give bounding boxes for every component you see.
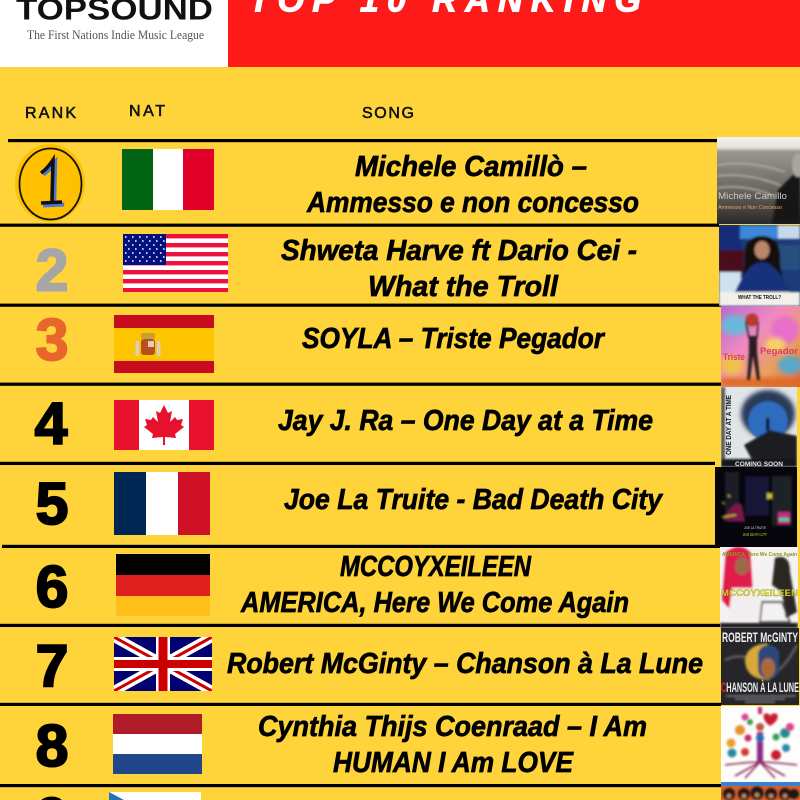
album cover 3: Pegador bbox=[760, 346, 798, 357]
logo tagline: The First Nations Indie Music League bbox=[27, 28, 204, 42]
flag: Czech Republic bbox=[109, 792, 201, 800]
song: Shweta Harve: Shweta Harve ft Dario Cei - bbox=[281, 235, 637, 267]
song: Robert McGinty: Robert McGinty – Chanson à La Lune bbox=[227, 648, 703, 680]
flag: Netherlands bbox=[113, 714, 202, 774]
song: SOYLA: SOYLA – Triste Pegador bbox=[302, 323, 606, 355]
song: McCoy x Eileen: AMERICA, Here We Come Again bbox=[240, 587, 629, 619]
song: Michele Camillò: Michele Camillò – bbox=[355, 151, 587, 183]
rank 6: 6 bbox=[36, 554, 68, 620]
song: Michele Camillò: Ammesso e non concesso bbox=[306, 187, 639, 219]
flag: Canada bbox=[114, 400, 214, 450]
row 4 bbox=[35, 387, 797, 468]
song: Shweta Harve: What the Troll bbox=[368, 271, 559, 303]
song: McCoy x Eileen bbox=[240, 551, 629, 619]
column headings bbox=[25, 103, 414, 122]
album cover 2 bbox=[719, 225, 800, 306]
row 7 bbox=[36, 628, 799, 705]
album cover 1: Michele Camillo bbox=[718, 191, 787, 202]
flag: USA bbox=[123, 234, 228, 292]
album cover 4 bbox=[721, 387, 797, 468]
rank 2: 2 bbox=[36, 238, 68, 304]
song: Cynthia Thijs Coenraad bbox=[258, 711, 647, 779]
rank 1 badge bbox=[15, 144, 85, 222]
album cover 6: MCCOYXEILEEN bbox=[721, 588, 798, 599]
row 1 bbox=[15, 137, 800, 224]
album cover 4: COMING SOON bbox=[735, 462, 783, 468]
heading: rank: RANK bbox=[25, 105, 76, 122]
album cover 5 bbox=[715, 467, 797, 547]
album cover 8 bbox=[721, 706, 800, 782]
row 6 bbox=[36, 547, 798, 628]
song: Michele Camillò bbox=[306, 151, 639, 219]
rank 5: 5 bbox=[36, 471, 68, 537]
row 5 bbox=[36, 467, 797, 547]
album cover 7 bbox=[721, 628, 799, 705]
row 8 bbox=[36, 706, 800, 782]
row 9 (cut off) bbox=[109, 782, 800, 800]
rank 4: 4 bbox=[35, 391, 68, 457]
song: Joe La Truite: Joe La Truite - Bad Death City bbox=[284, 484, 664, 516]
album cover 4: ONE DAY AT A TIME bbox=[726, 395, 733, 455]
album cover 3 bbox=[720, 306, 800, 387]
album cover 3: Triste bbox=[723, 352, 745, 363]
flag: Italy bbox=[122, 149, 214, 210]
album cover 6 bbox=[720, 547, 798, 628]
album cover 1 bbox=[717, 137, 800, 224]
song: McCoy x Eileen: MCCOYXEILEEN bbox=[340, 551, 532, 583]
title panel bbox=[228, 0, 800, 67]
rank 8: 8 bbox=[36, 713, 68, 779]
header banner bbox=[0, 0, 800, 67]
song: Shweta Harve bbox=[281, 235, 637, 303]
logo panel bbox=[0, 0, 228, 67]
rank 7: 7 bbox=[36, 633, 68, 699]
flag: Germany bbox=[116, 554, 210, 616]
album cover 5: BAD DEATH CITY bbox=[743, 532, 768, 537]
row 3 bbox=[36, 306, 800, 387]
flag: UK bbox=[114, 637, 212, 691]
album cover 2: WHAT THE TROLL? bbox=[738, 295, 782, 301]
row 2 bbox=[36, 225, 800, 306]
song: Jay J. Ra: Jay J. Ra – One Day at a Time bbox=[278, 405, 653, 437]
flag: France bbox=[114, 472, 210, 535]
album cover 5: JOE LA TRUITE bbox=[744, 525, 766, 530]
flag: Spain bbox=[114, 315, 214, 373]
heading: nationality: NAT bbox=[129, 103, 165, 120]
song: Cynthia Thijs Coenraad: HUMAN I Am LOVE bbox=[333, 747, 574, 779]
heading: song: SONG bbox=[362, 105, 414, 122]
album cover 9 bbox=[721, 782, 800, 800]
song: Cynthia Thijs Coenraad: Cynthia Thijs Coenraad – I Am bbox=[258, 711, 647, 743]
rank 3: 3 bbox=[36, 307, 68, 373]
album cover 1: Ammesso e Non Concesso bbox=[718, 205, 782, 211]
